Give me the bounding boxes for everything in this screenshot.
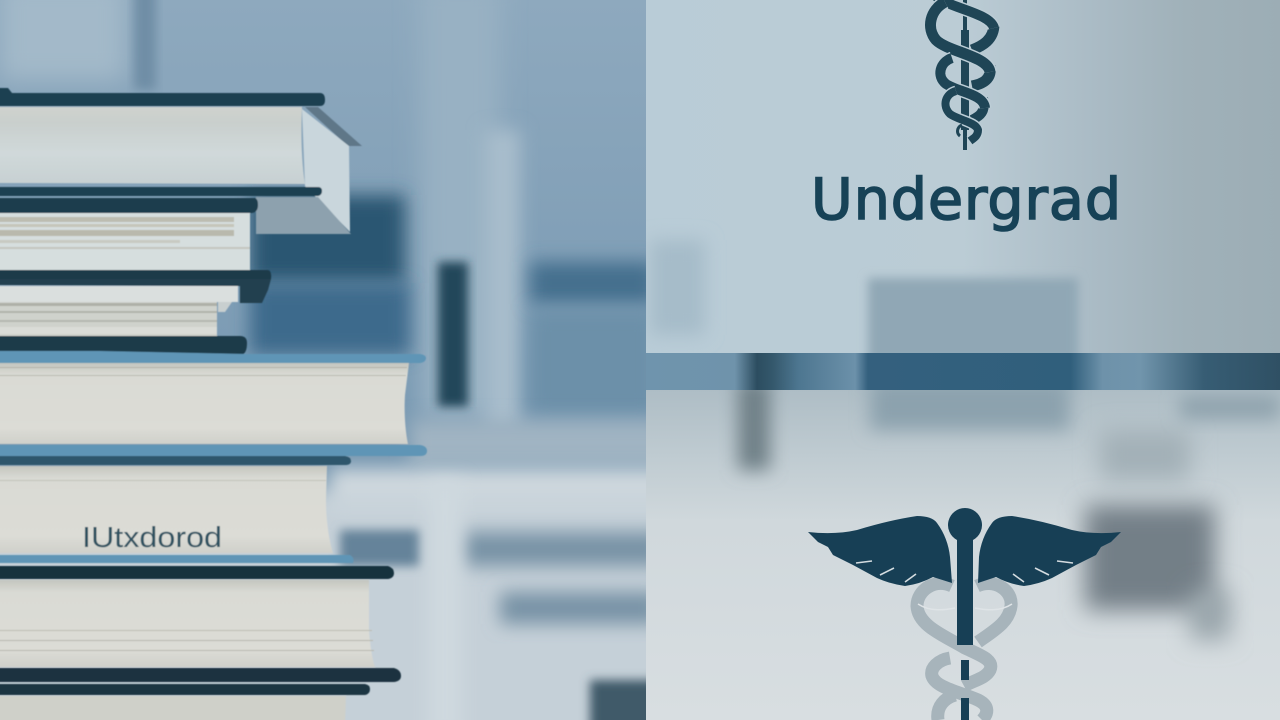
left wing xyxy=(808,516,952,586)
book 1: top dark book xyxy=(0,88,362,234)
book 4: blue cover book xyxy=(0,351,427,456)
heading: Undergrad: Undergrad xyxy=(811,167,1121,233)
spine label text: IUtxdorod xyxy=(82,522,222,554)
book 6: lower dark book xyxy=(0,580,401,695)
book stack xyxy=(0,88,427,720)
icon: caduceus with wings xyxy=(808,508,1121,720)
book 2: dark book with worn pages xyxy=(0,198,271,303)
grey serpents xyxy=(917,583,1011,720)
staff xyxy=(948,508,982,645)
book 7: bottom book xyxy=(0,696,346,720)
panel: lower right frosted panel xyxy=(646,380,1280,720)
horizontal dark band xyxy=(646,353,1280,390)
right wing xyxy=(978,516,1121,586)
blurred office background xyxy=(0,0,690,720)
icon: rod of Asclepius, dark teal xyxy=(930,0,994,150)
panel: upper right frosted panel xyxy=(646,0,1280,363)
book 3: thin pale book xyxy=(0,286,247,355)
book 5: book with spine label xyxy=(0,456,394,579)
